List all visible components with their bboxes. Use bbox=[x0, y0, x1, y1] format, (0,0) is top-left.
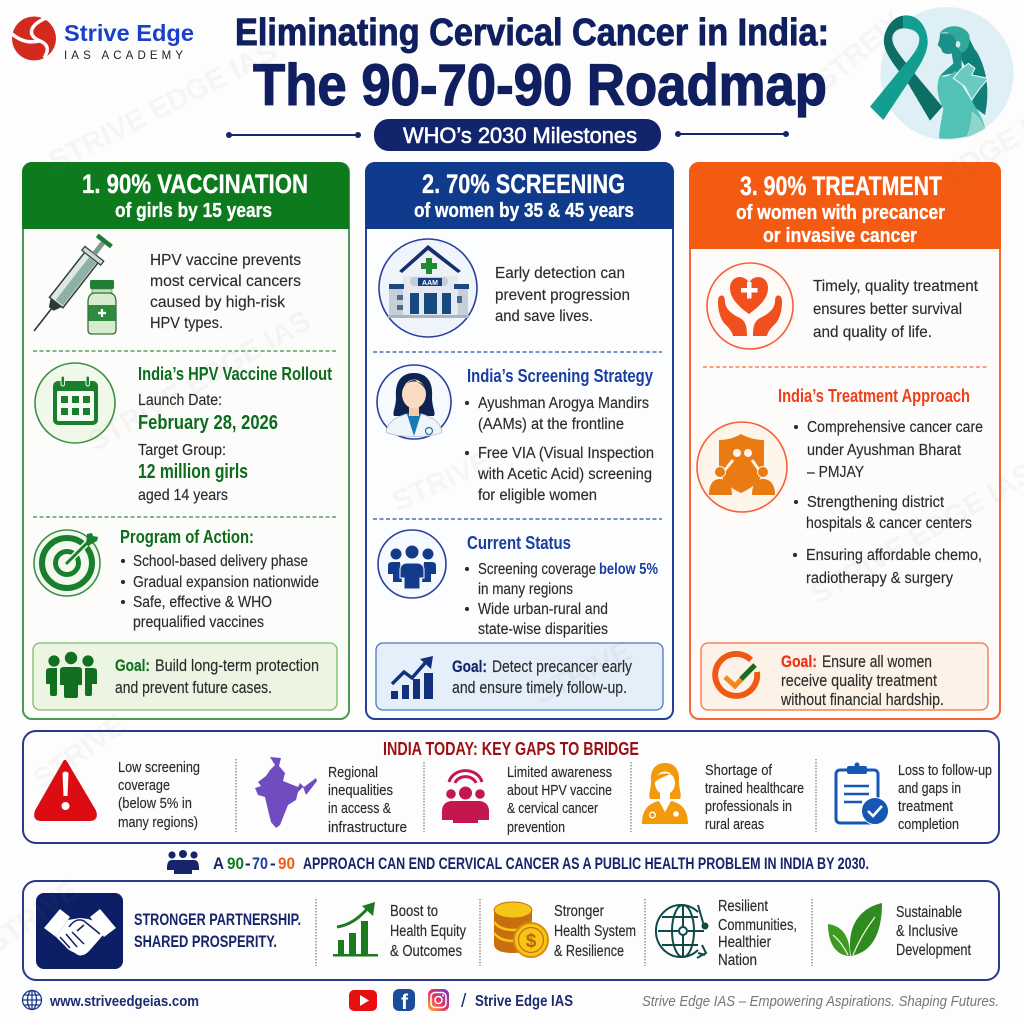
text: boost to health equity: & Outcomes bbox=[390, 943, 462, 960]
callout: goal, screening: Detect precancer early bbox=[492, 657, 632, 676]
text: STRIVE bbox=[28, 709, 132, 796]
text: low screening coverage: many regions) bbox=[118, 814, 198, 831]
icon: shield with people bbox=[697, 422, 787, 512]
icon: clipboard with check bbox=[836, 762, 888, 824]
title: Eliminating Cervical Cancer in India: bbox=[235, 12, 829, 54]
panel 3 header: 3. 90% TREATMENT bbox=[740, 171, 942, 201]
text: stronger partnership bbox=[134, 910, 301, 951]
text: boost to health equity: Health Equity bbox=[390, 923, 466, 940]
icon: healthcare professional bbox=[642, 763, 688, 824]
text: STRIVE bbox=[529, 635, 637, 711]
text: low screening coverage: Low screening bbox=[118, 759, 200, 776]
panel: 1. 90% vaccination bbox=[22, 162, 349, 719]
callout: goal, screening: and ensure timely follow-up. bbox=[452, 678, 627, 697]
callout: goal, treatment: Ensure all women bbox=[822, 652, 932, 671]
panel 1 header bbox=[22, 162, 349, 229]
text: limited awareness bbox=[507, 764, 612, 836]
icon: calendar bbox=[35, 363, 115, 443]
text: stronger health system: Stronger bbox=[554, 903, 604, 920]
text: low screening coverage: (below 5% in bbox=[118, 795, 192, 812]
text: HPV vaccine description: HPV vaccine prevents bbox=[150, 252, 301, 269]
text: India's HPV vaccine rollout: aged 14 years bbox=[138, 487, 228, 504]
text: regional inequalities: Regional bbox=[328, 764, 378, 781]
text: current status: state-wise disparities bbox=[478, 621, 608, 638]
logo: Strive Edge IAS Academy bbox=[12, 16, 194, 62]
icon: hands holding heart bbox=[707, 263, 793, 349]
icon: vaccine vial bbox=[88, 280, 116, 334]
text: HPV vaccine description: caused by high-risk bbox=[150, 294, 286, 311]
text: shortage of professionals: professionals in bbox=[705, 798, 792, 815]
text: timely treatment: ensures better survival bbox=[813, 301, 962, 318]
text: India's screening strategy: for eligible women bbox=[478, 487, 597, 504]
text: India's HPV vaccine rollout: Target Group: bbox=[138, 442, 226, 459]
text: STREIY bbox=[809, 6, 910, 97]
icon: Instagram bbox=[428, 989, 449, 1011]
callout: goal, vaccination bbox=[33, 643, 337, 710]
banner: 90-70-90 approach statement: 90 bbox=[227, 854, 244, 873]
text: loss to follow-up: and gaps in bbox=[898, 780, 961, 797]
banner: 90-70-90 approach statement: 70 bbox=[252, 854, 268, 873]
panel: 3. 90% treatment bbox=[689, 162, 1001, 719]
text: India's HPV vaccine rollout: India’s HPV Vaccine Rollout bbox=[138, 364, 332, 384]
text: Strive Edge IAS handle bbox=[461, 991, 573, 1012]
text: current status: below 5% bbox=[599, 561, 658, 578]
text: limited awareness: about HPV vaccine bbox=[507, 782, 612, 799]
panel 3 header: of women with precancer bbox=[736, 201, 945, 224]
text: India's treatment approach: Comprehensive cancer care bbox=[807, 419, 983, 436]
panel: India today key gaps bbox=[23, 731, 999, 843]
text: stronger partnership: SHARED PROSPERITY. bbox=[134, 932, 277, 951]
text: low screening coverage bbox=[118, 759, 200, 831]
banner: 90-70-90 approach statement: - bbox=[245, 854, 251, 873]
icon: web globe bbox=[22, 990, 42, 1010]
footer bbox=[22, 989, 999, 1014]
text: HPV vaccine description bbox=[150, 252, 301, 332]
icon: vaccine vial: ✚ bbox=[97, 308, 107, 320]
callout: goal, treatment bbox=[701, 643, 988, 710]
panel 2 header: of women by 35 & 45 years bbox=[414, 199, 634, 222]
text: Strive Edge IAS handle: Strive Edge IAS bbox=[475, 993, 573, 1010]
icon: awareness audience bbox=[442, 771, 489, 823]
text: loss to follow-up: treatment bbox=[898, 798, 954, 815]
text: India's treatment approach: Ensuring affordable chemo, bbox=[806, 547, 982, 564]
text: loss to follow-up: completion bbox=[898, 816, 959, 833]
text: program of action: Gradual expansion nationwide bbox=[133, 574, 319, 591]
callout: goal, vaccination: and prevent future cases. bbox=[115, 678, 272, 697]
panel 2 header: 2. 70% SCREENING bbox=[422, 169, 625, 199]
text: shortage of professionals: Shortage of bbox=[705, 762, 773, 779]
text: India's treatment approach: Strengthening district bbox=[807, 494, 945, 511]
text: current status bbox=[465, 533, 658, 638]
text: current status: Wide urban-rural and bbox=[478, 601, 608, 618]
callout: goal, treatment: without financial hardship. bbox=[780, 690, 944, 709]
icon: handshake bbox=[36, 893, 123, 969]
logo: Strive Edge IAS Academy: Strive Edge bbox=[64, 20, 194, 46]
icon: syringe bbox=[25, 232, 115, 338]
text: India's HPV vaccine rollout: February 28, 2026 bbox=[138, 411, 278, 434]
panel 1 header: 1. 90% VACCINATION bbox=[82, 169, 308, 199]
panel 1 header: of girls by 15 years bbox=[115, 199, 272, 222]
text: shortage of professionals: rural areas bbox=[705, 816, 764, 833]
text: regional inequalities: in access & bbox=[328, 800, 391, 817]
title: The 90-70-90 Roadmap bbox=[253, 53, 827, 118]
text: early detection: Early detection can bbox=[495, 265, 625, 282]
text: early detection: prevent progression bbox=[495, 287, 630, 304]
text: boost to health equity bbox=[390, 903, 466, 960]
icon: Facebook: f bbox=[401, 991, 409, 1014]
banner: 90-70-90 approach statement: 90 bbox=[278, 854, 295, 873]
text: India's treatment approach: radiotherapy & surgery bbox=[806, 570, 953, 587]
text: program of action: prequalified vaccines bbox=[133, 614, 264, 631]
panel 2 header bbox=[365, 162, 674, 229]
text: Strive Edge IAS handle: / bbox=[461, 991, 467, 1012]
icon: India map bbox=[255, 757, 317, 828]
callout: goal, screening: Goal: bbox=[452, 657, 487, 676]
text: early detection bbox=[495, 265, 630, 325]
text: India's treatment approach: under Ayushman Bharat bbox=[807, 442, 962, 459]
text: stronger health system: Health System bbox=[554, 923, 636, 940]
icon: green leaves bbox=[828, 903, 882, 956]
icon: Facebook bbox=[393, 989, 415, 1014]
text: India's screening strategy: Free VIA (Visual Inspection bbox=[478, 445, 654, 462]
text: stronger partnership: STRONGER PARTNERSHIP. bbox=[134, 910, 301, 929]
text: resilient communities: Communities, bbox=[718, 917, 797, 934]
text: resilient communities: Healthier bbox=[718, 934, 771, 951]
text: regional inequalities: infrastructure bbox=[328, 819, 407, 836]
heading: key gaps: INDIA TODAY: KEY GAPS TO BRIDGE bbox=[383, 738, 639, 759]
panel 3 header bbox=[689, 162, 1001, 249]
text: timely treatment: Timely, quality treatment bbox=[813, 278, 979, 295]
text: program of action: School-based delivery phase bbox=[133, 553, 308, 570]
text: India's treatment approach: India’s Treatment Approach bbox=[778, 386, 970, 406]
text: STRIVE EDGE IAS bbox=[82, 305, 316, 458]
text: HPV vaccine description: most cervical cancers bbox=[150, 273, 301, 290]
callout: goal, treatment: Goal: bbox=[781, 652, 817, 671]
banner: 90-70-90 approach statement bbox=[167, 850, 869, 874]
text: India's screening strategy: Ayushman Arogya Mandirs bbox=[478, 395, 649, 412]
text: regional inequalities: inequalities bbox=[328, 782, 393, 799]
callout: goal, screening bbox=[376, 643, 663, 710]
text: shortage of professionals bbox=[705, 762, 804, 833]
text: STRIVE EDGE IAS bbox=[44, 36, 282, 178]
banner: 90-70-90 approach statement: - bbox=[270, 854, 276, 873]
panel: 2. 70% screening bbox=[365, 162, 674, 719]
text: sustainable development: Development bbox=[896, 942, 972, 959]
text: current status: Screening coverage bbox=[478, 561, 596, 578]
icon: woman doctor bbox=[377, 365, 451, 439]
icon: networked globe bbox=[656, 905, 708, 958]
text: website: www.striveedgeias.com bbox=[49, 993, 199, 1010]
text: limited awareness: prevention bbox=[507, 819, 565, 836]
icon: target with arrow bbox=[34, 530, 100, 596]
text: sustainable development: Sustainable bbox=[896, 904, 962, 921]
text: sustainable development: & Inclusive bbox=[896, 923, 958, 940]
text: shortage of professionals: trained healthcare bbox=[705, 780, 804, 797]
text: India's screening strategy bbox=[465, 366, 654, 504]
text: program of action: Safe, effective & WHO bbox=[133, 594, 272, 611]
icon: AAM health centre bbox=[379, 239, 477, 337]
text: India's HPV vaccine rollout bbox=[138, 364, 332, 504]
text: limited awareness: & cervical cancer bbox=[507, 800, 598, 817]
text: HPV vaccine description: HPV types. bbox=[150, 315, 223, 332]
subtitle pill: WHO's 2030 Milestones bbox=[226, 119, 789, 151]
text: early detection: and save lives. bbox=[495, 308, 593, 325]
text: India's treatment approach bbox=[778, 386, 983, 587]
panel 3 header: or invasive cancer bbox=[763, 224, 917, 247]
text: stronger health system: & Resilience bbox=[554, 943, 624, 960]
subtitle pill: WHO's 2030 Milestones: WHO’s 2030 Milestones bbox=[403, 123, 637, 148]
text: resilient communities: Resilient bbox=[718, 898, 769, 915]
text: boost to health equity: Boost to bbox=[390, 903, 438, 920]
text: India's treatment approach: hospitals & cancer centers bbox=[806, 515, 972, 532]
icon: growth chart bbox=[333, 902, 378, 956]
text: resilient communities bbox=[718, 898, 797, 969]
text: current status: in many regions bbox=[478, 581, 573, 598]
callout: goal, treatment: receive quality treatment bbox=[781, 671, 937, 690]
text: India's HPV vaccine rollout: Launch Date: bbox=[138, 392, 222, 409]
text: India's screening strategy: India’s Screening Strategy bbox=[467, 366, 653, 386]
logo: Strive Edge IAS Academy: IAS ACADEMY bbox=[64, 50, 183, 62]
text: resilient communities: Nation bbox=[718, 952, 757, 969]
callout: goal, vaccination: Build long-term protection bbox=[155, 656, 319, 675]
text: loss to follow-up bbox=[898, 762, 992, 833]
text: low screening coverage: coverage bbox=[118, 777, 170, 794]
text: timely treatment: and quality of life. bbox=[813, 324, 932, 341]
text: regional inequalities bbox=[328, 764, 407, 836]
icon: gold coins: $ bbox=[526, 931, 537, 952]
text: India's screening strategy: (AAMs) at the frontline bbox=[478, 416, 624, 433]
panel: partnership and outcomes bbox=[23, 881, 999, 980]
text: stronger health system bbox=[554, 903, 636, 960]
text: current status: Current Status bbox=[467, 533, 571, 553]
text: sustainable development bbox=[896, 904, 972, 959]
icon: teal ribbon and woman with India map bbox=[870, 7, 1014, 140]
callout: goal, vaccination: Goal: bbox=[115, 656, 150, 675]
title bbox=[235, 12, 829, 118]
icon: warning triangle bbox=[36, 762, 95, 819]
icon: AAM health centre: AAM bbox=[422, 280, 438, 287]
text: India's HPV vaccine rollout: 12 million girls bbox=[138, 460, 248, 483]
text: limited awareness: Limited awareness bbox=[507, 764, 612, 781]
icon: YouTube bbox=[349, 990, 377, 1011]
text: loss to follow-up: Loss to follow-up bbox=[898, 762, 992, 779]
text: timely treatment bbox=[813, 278, 979, 341]
banner: 90-70-90 approach statement: A bbox=[213, 854, 224, 873]
icon: gold coins bbox=[494, 902, 548, 957]
text: program of action: Program of Action: bbox=[120, 527, 254, 547]
text: India's screening strategy: with Acetic Acid) screening bbox=[477, 466, 652, 483]
text: program of action bbox=[120, 527, 319, 631]
text: India's treatment approach: – PMJAY bbox=[807, 464, 864, 481]
icon: group of people bbox=[378, 530, 446, 598]
text: STRIVE bbox=[387, 445, 496, 518]
